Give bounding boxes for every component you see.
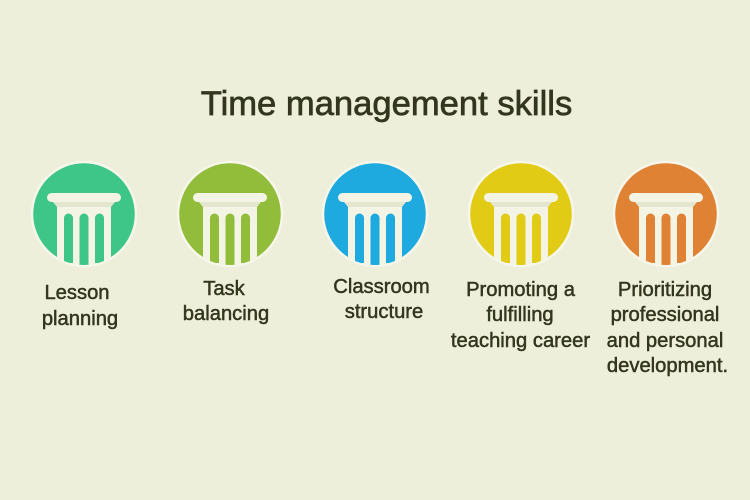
label: task balancing: Task: [203, 278, 246, 300]
icon: blue pillar: [323, 162, 427, 266]
title: Time management skills: [201, 85, 572, 123]
label: classroom structure: structure: [345, 301, 423, 323]
label: prioritizing professional and personal development: development.: [607, 355, 728, 377]
label: lesson planning: planning: [42, 308, 118, 330]
label: promoting a fulfilling teaching career: fulfilling: [486, 304, 554, 326]
label: prioritizing professional and personal development: professional: [611, 304, 719, 326]
icon: yellow pillar: [469, 162, 573, 266]
label: classroom structure: [333, 276, 430, 323]
icon: green pillar: [32, 162, 136, 266]
label: task balancing: [183, 278, 269, 325]
label: prioritizing professional and personal development: and personal: [607, 330, 723, 352]
label: lesson planning: [42, 282, 118, 330]
label: promoting a fulfilling teaching career: [451, 279, 590, 352]
icon: lime pillar: [178, 162, 282, 266]
label: promoting a fulfilling teaching career: teaching career: [451, 330, 590, 352]
label: prioritizing professional and personal development: [607, 279, 728, 377]
label: lesson planning: Lesson: [44, 282, 110, 304]
label: prioritizing professional and personal development: Prioritizing: [618, 279, 712, 301]
label: task balancing: balancing: [183, 303, 269, 325]
label: promoting a fulfilling teaching career: Promoting a: [466, 279, 576, 301]
icon: orange pillar: [614, 162, 718, 266]
label: classroom structure: Classroom: [333, 276, 430, 298]
